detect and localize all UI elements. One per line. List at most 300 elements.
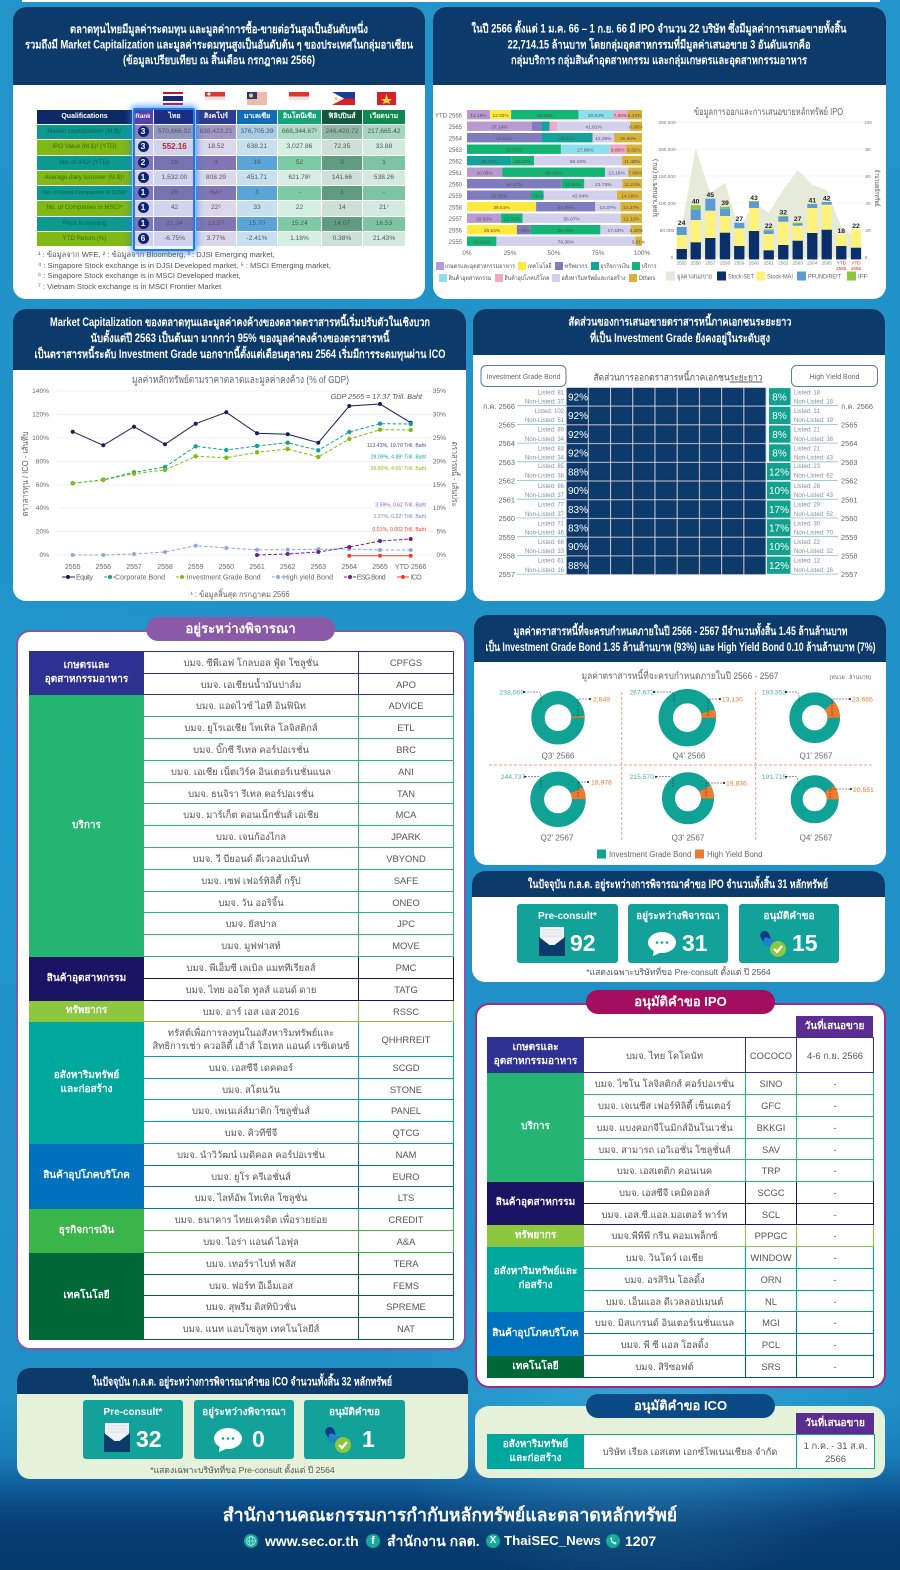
comparison table: YTD Return (%) xyxy=(62,235,106,242)
bar percentage labels: 56.07% xyxy=(563,216,580,222)
chart title: มูลค่าตราสารหนี้ที่จะครบกำหนดภายในปี 2566 - 2567 xyxy=(582,668,778,682)
table: approved IPO companies: BKKGI xyxy=(757,1122,785,1133)
left year labels: 2562 xyxy=(499,476,515,486)
right year labels: 2562 xyxy=(841,476,857,486)
heading: ASEAN market comparison xyxy=(13,7,425,85)
bar count labels: 40 xyxy=(692,198,700,206)
table: companies under consideration: บมจ. เอสซีจี เดคคอร์ xyxy=(209,1062,293,1073)
x axis years: YTD xyxy=(837,260,847,266)
table: approved IPO companies: บมจ. แบงคอกจีโนมิกส์อินโนเวชั่น xyxy=(596,1122,733,1133)
table: approved ICO xyxy=(487,1434,875,1469)
icon: speech bubble xyxy=(214,1428,242,1452)
card: Pre-consult: 92 xyxy=(570,930,596,956)
table: companies under consideration: บริการ xyxy=(72,820,101,830)
left axis ticks: 40% xyxy=(36,505,49,512)
table: companies under consideration: และก่อสร้าง xyxy=(60,1084,112,1094)
table: approved IPO companies: SRS xyxy=(761,1361,781,1372)
comparison table: 3.77% xyxy=(207,235,225,242)
table: approved IPO companies: บมจ. เอ็นแอล ดีเวลลอปเมนต์ xyxy=(606,1296,723,1306)
icon: website xyxy=(244,1534,258,1548)
x axis years: 2559 xyxy=(734,260,745,266)
right listed labels: Non-Listed: 18 xyxy=(794,400,834,406)
left year labels: 2565 xyxy=(499,420,515,430)
bar percentage labels: 3.81% xyxy=(632,240,646,246)
comparison table: 14 xyxy=(338,204,346,211)
x axis labels: 100% xyxy=(634,250,650,257)
comparison table: 246,420.72 xyxy=(325,128,358,135)
comparison table: 0.38% xyxy=(333,235,351,242)
bar percentage labels: 7.96% xyxy=(628,170,643,176)
bar percentage labels: 7.06% xyxy=(530,194,545,200)
footnotes: ⁴ : Singapore Stock exchange is in DJSI Developed market, ⁵ : MSCI Emerging market, xyxy=(38,261,331,270)
bar count labels: 43 xyxy=(750,195,758,202)
table: companies under consideration: QHHRREIT xyxy=(382,1034,430,1044)
table: approved IPO companies: - xyxy=(833,1165,837,1176)
legend: bond series: Equity xyxy=(76,574,94,582)
comparison table: เวียดนาม xyxy=(370,113,398,120)
table: companies under consideration: บมจ. เจนก้องไกล xyxy=(216,831,286,842)
chart title: สัดส่วนการออกตราสารหนี้ภาคเอกชนระยะยาว xyxy=(594,370,762,384)
pill heading: approved IPO xyxy=(586,990,775,1014)
table: approved IPO companies: - xyxy=(833,1361,837,1372)
left listed labels: Non-Listed: 16 xyxy=(525,568,565,574)
footnotes: ⁶ : Singapore Stock exchange is in MSCI Developed market, xyxy=(38,271,241,280)
comparison table: 42 xyxy=(171,204,178,211)
investment grade percentages: 83% xyxy=(568,505,588,516)
right listed labels: Non-Listed: 19 xyxy=(794,418,834,424)
year labels: 2559 xyxy=(449,194,463,200)
high yield percentages: 8% xyxy=(772,411,787,422)
bars: Stock-SET xyxy=(677,230,861,259)
x axis years: 2566 xyxy=(851,266,862,271)
table: companies under consideration: EURO xyxy=(392,1170,420,1182)
area: offering value xyxy=(682,148,856,258)
x axis years: 2564 xyxy=(342,564,357,571)
legend: IPO series: Stock-MAI xyxy=(767,274,793,280)
series: high yield bond xyxy=(71,544,413,557)
comparison table: 72.35 xyxy=(334,143,350,150)
left year labels: 2559 xyxy=(499,533,515,542)
chart: IPO value share by sector stacked bars xyxy=(435,110,657,282)
x axis years: 2562 xyxy=(778,260,789,266)
donut: Q2 2567: 18,978 xyxy=(591,780,612,786)
investment grade percentages: 90% xyxy=(568,542,588,553)
bar count labels: 22 xyxy=(852,223,860,230)
x axis years: YTD xyxy=(851,260,861,266)
table: companies under consideration: ETL xyxy=(397,722,415,733)
table: companies under consideration: SAFE xyxy=(394,875,418,886)
chart: market value line chart xyxy=(21,374,461,600)
year labels: 2558 xyxy=(449,206,463,212)
table: companies under consideration: บมจ. แอดไวซ์ ไอที อินฟินิท xyxy=(196,700,306,711)
table: companies under consideration: บมจ. ไลท์อัพ โทเทิล โซลูชั่น xyxy=(195,1192,307,1203)
year labels: 2557 xyxy=(449,217,463,223)
right listed labels: Non-Listed: 62 xyxy=(794,474,834,480)
right listed labels: Listed: 18 xyxy=(794,390,821,396)
left axis labels: 0 xyxy=(671,255,674,261)
table: approved IPO companies: PCL xyxy=(762,1339,780,1350)
comparison table: 552.16 xyxy=(162,142,187,151)
comparison table: ไทย xyxy=(168,113,181,120)
comparison table: 1.18% xyxy=(290,235,309,242)
comparison table: 15.24 xyxy=(291,220,308,227)
comparison table: อินโดนีเซีย xyxy=(283,113,316,120)
table: approved IPO companies: อสังหาริมทรัพย์และ xyxy=(494,1266,577,1277)
card: Pre-consult: 32 xyxy=(136,1426,162,1452)
table: companies under consideration: สินค้าอุปโภคบริโภค xyxy=(43,1170,130,1181)
legend: sectors: อสังหาริมทรัพย์และก่อสร้าง xyxy=(562,274,626,282)
right year labels: 2565 xyxy=(841,420,857,430)
bar percentage labels: 13.16% xyxy=(608,170,625,176)
table: companies under consideration: อุตสาหกรรมอาหาร xyxy=(45,674,128,685)
donut: Q2 2567: 244,737 xyxy=(501,774,525,781)
series: equity xyxy=(71,402,413,447)
latest value labels: 3.59%, 0.62 Trill. Baht xyxy=(375,502,427,508)
box: Investment Grade Bond: Investment Grade Bond xyxy=(487,374,561,381)
card: Pre-consult xyxy=(83,1400,183,1459)
donut: Q4 2567 xyxy=(762,774,874,842)
panel: investment grade share xyxy=(473,309,885,601)
table: companies under consideration: ANI xyxy=(398,766,414,777)
bar percentage labels: 20.09% xyxy=(476,170,493,176)
bar percentage labels: 12.29% xyxy=(595,136,612,142)
table: approved IPO companies: SAV xyxy=(762,1144,780,1154)
left axis ticks: 0% xyxy=(39,552,49,559)
table: companies under consideration: PANEL xyxy=(391,1105,421,1116)
table: companies under consideration: CPFGS xyxy=(390,657,422,668)
high yield percentages: 8% xyxy=(772,392,787,404)
bar percentage labels: 42.04% xyxy=(572,194,589,200)
comparison table: No. of listed Companies in DJSI³ xyxy=(43,190,126,196)
table: companies under consideration: CREDIT xyxy=(389,1214,423,1225)
x axis years: 2563 xyxy=(793,260,803,266)
comparison table: Rank xyxy=(135,113,151,120)
icon: facebook xyxy=(366,1534,380,1548)
left axis labels: 150,000 xyxy=(658,174,676,180)
right axis ticks: 30% xyxy=(433,412,446,418)
high yield percentages: 12% xyxy=(769,468,789,478)
right year labels: 2564 xyxy=(841,439,857,448)
right listed labels: Listed: 30 xyxy=(794,521,821,527)
year labels: YTD 2566 xyxy=(435,114,463,120)
investment grade percentages: 92% xyxy=(568,411,588,422)
table: approved ICO: อสังหาริมทรัพย์ xyxy=(503,1438,568,1450)
bar count labels xyxy=(678,192,860,235)
comparison table: 1 xyxy=(141,172,145,182)
card: approved xyxy=(739,904,839,963)
table: companies under consideration: บมจ. ซีพีเอฟ โกลบอล ฟู้ด โซลูชั่น xyxy=(183,657,319,668)
note: pre-consult: *แสดงเฉพาะบริษัทที่ขอ Pre-consult ตั้งแต่ ปี 2564 xyxy=(586,967,771,977)
legend: sectors: เกษตรและอุตสาหกรรมอาหาร xyxy=(445,263,516,270)
latest value labels: 1.27%, 0.22¹ Trill. Baht xyxy=(374,514,427,520)
bar percentage labels: 11.49% xyxy=(624,159,641,165)
right axis ticks: 5% xyxy=(436,528,446,536)
table: companies under consideration: ADVICE xyxy=(389,700,423,711)
panel: ASEAN market comparison xyxy=(13,7,425,299)
left listed labels: Listed: 81 xyxy=(538,390,565,396)
table: companies under consideration: FEMS xyxy=(393,1280,419,1290)
left listed labels: Listed: 89 xyxy=(538,428,565,434)
x axis years: 2559 xyxy=(188,564,204,571)
right axis ticks: 0% xyxy=(436,552,446,559)
pill heading: approved ICO xyxy=(586,1394,775,1418)
x axis labels xyxy=(462,250,650,257)
comparison table: 451.71 xyxy=(247,174,267,181)
left axis labels: 100 xyxy=(864,120,872,126)
right listed labels: Listed: 31 xyxy=(794,409,821,415)
bar count labels: 18 xyxy=(838,228,845,235)
x axis years: 2563 xyxy=(311,564,326,571)
right axis ticks: 20% xyxy=(433,458,446,466)
table: approved ICO: 1 ก.ค. - 31 ส.ค. xyxy=(804,1440,867,1450)
legend: sectors: เทคโนโลยี xyxy=(528,262,552,270)
x axis years: 2561 xyxy=(764,260,774,266)
table: approved IPO companies: บมจ. เอสซีจี เคมิคอลส์ xyxy=(619,1187,710,1198)
card: approved: 1 xyxy=(362,1426,375,1452)
table: approved IPO companies: เทคโนโลยี xyxy=(512,1360,559,1372)
donut: Q3 2567: 215,570 xyxy=(629,774,654,781)
legend: IPO series xyxy=(666,272,868,280)
bar percentage labels: 21.73% xyxy=(595,182,612,188)
year labels: 2565 xyxy=(449,125,463,131)
table: companies under consideration: บมจ. บิ๊กซี รีเทล คอร์ปอเรชั่น xyxy=(193,744,309,755)
right axis ticks: 15% xyxy=(433,482,446,489)
bar percentage labels: 6.28% xyxy=(630,228,644,234)
heading: ICO filing status xyxy=(17,1368,468,1394)
left listed labels: Non-Listed: 51 xyxy=(525,418,565,424)
x axis years: 2555 xyxy=(677,260,687,266)
donut: Q4 2567: Q4' 2567 xyxy=(800,834,833,842)
right listed labels: Listed: 21 xyxy=(794,428,821,434)
card: Pre-consult: Pre-consult* xyxy=(538,911,597,922)
table: approved IPO companies: บมจ. เจเนซีส เฟอร์ทิลิตี้ เซ็นเตอร์ xyxy=(598,1100,731,1111)
year labels: 2560 xyxy=(449,182,463,188)
table: companies under consideration: บมจ. เพเนเล่ส์มาติก โซลูชั่นส์ xyxy=(192,1105,310,1116)
table: approved IPO companies: บมจ.พีพีพี กรีน คอมเพล็กซ์ xyxy=(611,1230,718,1241)
latest value labels xyxy=(367,443,427,533)
table: approved IPO companies: สินค้าอุปโภคบริโภค xyxy=(492,1328,579,1338)
comparison table: 21.34 xyxy=(166,220,183,227)
left year labels: 2557 xyxy=(499,570,515,579)
left listed labels: Listed: 86 xyxy=(538,484,565,490)
heading: investment grade share: ที่เป็น Investment Grade ยังคงอยู่ในระดับสูง xyxy=(590,329,770,346)
heading: ASEAN market comparison: (ข้อมูลเปรียบเทียบ ณ สิ้นเดือน กรกฎาคม 2566) xyxy=(123,51,315,68)
year labels: 2564 xyxy=(449,136,463,142)
card: approved: อนุมัติคำขอ xyxy=(329,1407,380,1418)
table: companies under consideration: สิทธิการเช่า ควอลิตี้ เฮ้าส์ โฮเทล แอนด์ เรซิเดนซ์ xyxy=(152,1040,350,1051)
panel: market cap and bonds % of GDP xyxy=(13,309,466,601)
legend: bond grade: Investment Grade Bond xyxy=(609,850,691,859)
donut: Q4 2566: 267,672 xyxy=(629,690,654,696)
bar count labels: 22 xyxy=(765,223,773,230)
contact: X account: ThaiSEC_News xyxy=(504,1533,601,1548)
right listed labels: Non-Listed: 52 xyxy=(794,512,834,518)
card: approved xyxy=(304,1400,405,1459)
table: approved IPO companies: - xyxy=(833,1100,837,1111)
table: companies under consideration: บมจ. สุพรีม ดิสทิบิวชั่น xyxy=(206,1301,296,1312)
x axis years: 2556 xyxy=(96,564,111,571)
card: under consideration: อยู่ระหว่างพิจารณา xyxy=(636,911,720,922)
comparison table: -2.41% xyxy=(247,235,267,242)
right year labels: 2560 xyxy=(841,514,857,523)
left axis labels: 80 xyxy=(865,147,871,153)
table: approved IPO companies xyxy=(487,1037,874,1378)
donut: Q4 2566 xyxy=(629,690,743,760)
table: approved IPO companies: MGI xyxy=(762,1317,780,1328)
icon: envelope xyxy=(539,927,565,956)
bar count labels: 39 xyxy=(721,200,729,207)
comparison table: 1 xyxy=(141,202,145,212)
comparison table: 1,532.00 xyxy=(162,174,187,181)
left listed labels: Non-Listed: 38 xyxy=(525,474,565,480)
comparison table: No. of IPO² (YTD) xyxy=(60,159,109,166)
table: approved IPO companies: COCOCO xyxy=(750,1050,792,1060)
table: companies under consideration: TATG xyxy=(394,984,418,995)
left year labels: 2564 xyxy=(499,439,515,448)
left listed labels: Listed: 85 xyxy=(538,464,565,470)
x axis years: 2560 xyxy=(219,564,234,571)
comparison table: 3 xyxy=(255,189,259,196)
table: companies under consideration: บมจ. วัน ออริจิ้น xyxy=(218,896,284,908)
x axis years: 2562 xyxy=(280,564,296,571)
legend: bond grade xyxy=(597,850,762,859)
table: approved IPO companies: เกษตรและ xyxy=(513,1042,558,1053)
x axis years: 2565 xyxy=(836,266,847,271)
card: Pre-consult: Pre-consult* xyxy=(104,1407,162,1418)
right year labels: 2558 xyxy=(841,552,857,560)
axis titles: มูลค่าเสนอขาย (ลบ.) xyxy=(652,159,659,217)
axis titles: ตราสารทุน / ICO - เส้นทึบ xyxy=(21,432,30,516)
table: companies under consideration: บมจ. แนท แอบโซลูท เทคโนโลยีส์ xyxy=(183,1323,319,1334)
comparison table: IPO Value (M.$)² (YTD) xyxy=(52,143,117,150)
table: approved IPO companies: - xyxy=(833,1230,837,1241)
comparison table: 2 xyxy=(141,156,145,166)
left year labels: 2561 xyxy=(499,496,515,504)
left listed labels: Non-Listed: 34 xyxy=(525,437,565,443)
table: companies under consideration: SPREME xyxy=(386,1301,426,1312)
series: ESG bond xyxy=(255,537,413,557)
bar count labels: 24 xyxy=(678,220,686,227)
comparison table: สิงคโปร์ xyxy=(204,113,228,120)
box: High Yield Bond: High Yield Bond xyxy=(810,374,860,381)
bar percentage labels: 25.28% xyxy=(481,159,498,165)
flags row xyxy=(163,92,396,105)
comparison table: 19 xyxy=(253,159,261,166)
bar percentage labels: 7.96% xyxy=(517,228,531,234)
left axis ticks: 140% xyxy=(32,388,49,395)
bar percentage labels: 8.43% xyxy=(628,113,642,119)
legend: bond series: Corporate Bond xyxy=(115,574,165,582)
bar count labels: 27 xyxy=(794,216,802,223)
table: companies under consideration: SCGD xyxy=(392,1062,420,1073)
right listed labels: Non-Listed: 70 xyxy=(794,530,834,536)
comparison table: Price to earning xyxy=(63,220,106,227)
legend: bond series xyxy=(62,574,422,582)
green waffle cells xyxy=(767,388,790,574)
panel: IPO overview xyxy=(433,7,886,299)
donut: Q3 2566: Q3' 2566 xyxy=(542,752,575,760)
table: approved IPO companies: บมจ. วินโดว์ เอเชีย xyxy=(626,1252,703,1263)
comparison table: 668,344.67² xyxy=(282,128,317,135)
x axis years: 2560 xyxy=(749,260,760,266)
bar percentage labels: 42.64% xyxy=(496,136,513,142)
latest value labels: 113.43%, 19.70 Trill. Baht xyxy=(367,443,427,449)
heading: market cap and bonds: นับตั้งแต่ปี 2563 เป็นต้นมา มากกว่า 95% ของมูลค่าคงค้างของตราสารหนี้ xyxy=(90,329,390,346)
table: approved IPO companies: - xyxy=(833,1317,837,1328)
card: under consideration: อยู่ระหว่างพิจารณา xyxy=(202,1407,286,1418)
left axis ticks: 80% xyxy=(36,458,49,466)
right listed labels: Listed: 28 xyxy=(794,484,821,490)
bar percentage labels: 6.86% xyxy=(629,124,644,130)
x axis years: 2556 xyxy=(691,260,701,266)
legend: bond series: ICO xyxy=(411,574,422,582)
panel: ICO approved xyxy=(475,1406,885,1478)
gridlines xyxy=(675,122,864,230)
x axis years: 2558 xyxy=(720,260,731,266)
chart: market value line chart: ตราสารหนี้ - เส้นประ xyxy=(450,442,461,506)
table: approved IPO companies: บมจ. เอสเตติก คอนเนค xyxy=(617,1165,712,1176)
icon: X: X xyxy=(490,1535,496,1546)
donut: Q3 2566: 238,069 xyxy=(499,690,524,696)
donut: Q4 2567: 20,551 xyxy=(853,787,874,794)
icon: envelope xyxy=(104,1423,130,1452)
bars: PFUND and REIT xyxy=(677,199,832,235)
bar percentage labels: 12.86% xyxy=(565,182,582,188)
table: companies under consideration: บมจ. คิวทีซีจี xyxy=(225,1127,277,1138)
left listed labels: Listed: 83 xyxy=(538,446,565,452)
table: approved IPO companies: - xyxy=(833,1274,837,1285)
panel: ICO filing status xyxy=(17,1368,468,1479)
contact: website: www.sec.or.th xyxy=(265,1533,359,1549)
comparison table: 21⁷ xyxy=(379,204,389,211)
comparison table: 18.52 xyxy=(208,143,224,150)
table: companies under consideration xyxy=(29,651,454,1340)
legend: sectors: บริการ xyxy=(642,263,657,270)
right year labels: 2559 xyxy=(841,533,857,542)
left year labels: 2560 xyxy=(499,514,515,523)
right year labels: ก.ค. 2566 xyxy=(841,402,873,411)
bar percentage labels: 17.43% xyxy=(607,228,624,234)
card: approved: อนุมัติคำขอ xyxy=(763,911,815,922)
table: companies under consideration: บมจ. ไทย ออโต ทูลส์ แอนด์ ดาย xyxy=(186,984,316,995)
legend: bond series: High yield Bond xyxy=(283,574,333,582)
high yield percentages: 8% xyxy=(772,448,787,460)
table: companies under consideration: บมจ. มูฟฟาสท์ xyxy=(221,940,281,951)
bars: IFF xyxy=(691,201,803,231)
heading: IPO overview: 22,714.15 ล้านบาท โดยกลุ่มอุตสาหกรรมที่มีมูลค่าเสนอขาย 3 อันดับแรกคือ xyxy=(508,36,811,52)
legend: bond grade: High Yield Bond xyxy=(707,850,762,859)
x axis labels: 25% xyxy=(504,250,517,257)
chart: IPO issuance value and count: จำนวนหลักทรัพย์ xyxy=(873,170,881,207)
table: approved IPO companies: NL xyxy=(765,1296,777,1306)
right axis ticks: 10% xyxy=(433,505,446,512)
left axis labels: 50,000 xyxy=(660,228,675,234)
right listed labels: Non-Listed: 43 xyxy=(794,493,834,499)
right listed labels: Listed: 22 xyxy=(794,540,821,546)
bar percentage labels: 58.78% xyxy=(545,170,562,176)
table: companies under consideration: บมจ. ยัสปาล xyxy=(225,918,276,929)
bar percentage labels: 14.37% xyxy=(600,205,617,211)
table: companies under consideration: RSSC xyxy=(393,1006,419,1016)
latest value labels: 28.09%, 4.88¹ Trill. Baht xyxy=(371,454,427,460)
table: companies under consideration: VBYOND xyxy=(386,853,426,864)
bar percentage labels: 33.75% xyxy=(557,205,574,211)
legend: sectors xyxy=(436,262,657,282)
unit note: (หน่วย : ล้านบาท) xyxy=(829,674,871,681)
table: companies under consideration: JPARK xyxy=(391,831,421,842)
bar percentage labels: 53.65% xyxy=(506,148,523,154)
left axis ticks: 20% xyxy=(36,528,49,536)
